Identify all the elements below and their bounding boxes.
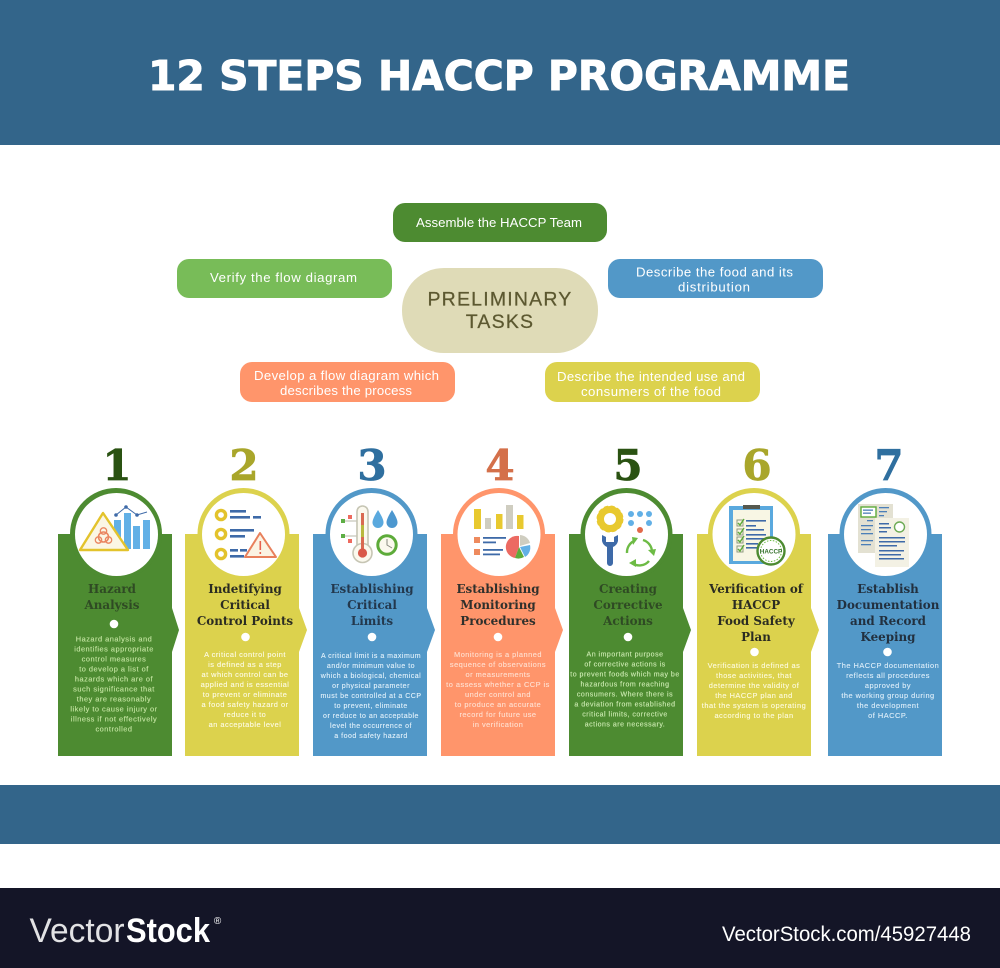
heading 6 (708, 582, 804, 644)
icon: hazard and chart (80, 505, 150, 550)
footer logo: Stock (126, 912, 210, 950)
description 4: Monitoring is a planned (454, 650, 542, 659)
description 1: likely to cause injury or (70, 704, 158, 714)
dot 4 (494, 633, 502, 641)
description 3: must be controlled at a CCP (320, 693, 422, 700)
heading 7: Establish (857, 582, 919, 596)
circle 2 (198, 488, 290, 580)
heading 3: Establishing (330, 582, 414, 596)
description 4: record for future use (459, 710, 537, 719)
step 4 column (441, 441, 563, 756)
step 6 column (697, 441, 819, 756)
description 6: Verification is defined as (708, 661, 800, 670)
task: describe the food: Describe the food and its (636, 264, 793, 280)
heading 4: Establishing (456, 582, 540, 596)
heading 1: Hazard (88, 582, 137, 596)
card 3 (313, 534, 435, 756)
dot 1 (110, 620, 118, 628)
task: verify the flow diagram (177, 259, 392, 298)
description 1: such significance that (73, 684, 155, 694)
heading 7: Documentation (837, 598, 940, 612)
task: describe the intended use: consumers of the food (581, 384, 721, 399)
task: develop a flow diagram (240, 362, 455, 402)
heading 2: Control Points (197, 614, 293, 628)
description 5: hazardous from reaching (581, 682, 669, 688)
description 3: to prevent, eliminate (334, 703, 408, 710)
description 5: An important purpose (587, 652, 663, 658)
heading 6: Food Safety (717, 614, 796, 628)
icon: control points and warning (216, 510, 276, 559)
heading 5 (593, 582, 663, 628)
description 3: and/or minimum value to (327, 663, 415, 670)
footer logo (30, 912, 222, 950)
heading 6: Verification of (708, 582, 804, 596)
centre label: preliminary tasks: PRELIMINARY (427, 288, 573, 310)
description 7 (837, 661, 939, 720)
circle 3 (326, 488, 418, 580)
description 5: consumers. Where there is (577, 692, 673, 698)
heading 7: and Record (850, 614, 927, 628)
heading 3: Critical (347, 598, 397, 612)
number 2: 2 (229, 441, 259, 490)
description 2 (201, 650, 289, 729)
description 5 (570, 652, 680, 728)
footer logo: Vector (30, 912, 124, 950)
description 3: a food safety hazard (334, 733, 408, 740)
description 5: critical limits, corrective (582, 712, 668, 718)
icon: documents (858, 504, 909, 567)
description 4: to produce an accurate (455, 700, 541, 709)
heading 4 (456, 582, 540, 628)
description 6: those activities, that (716, 671, 792, 680)
heading 2: Critical (220, 598, 270, 612)
footer logo: ® (214, 916, 222, 927)
description 2: is defined as a step (208, 660, 282, 669)
dot 2 (241, 633, 250, 641)
task: develop a flow diagram: Develop a flow diagram which (254, 368, 439, 383)
description 1: control measures (82, 654, 146, 664)
heading 1 (84, 582, 140, 612)
description 3: A critical limit is a maximum (321, 653, 421, 660)
header banner (0, 0, 1000, 145)
heading 3 (330, 582, 414, 628)
description 2: at which control can be (201, 670, 289, 679)
dot 5 (624, 633, 632, 641)
number 3: 3 (357, 441, 387, 490)
task: assemble the team (393, 203, 607, 242)
description 4: to assess whether a CCP is (446, 680, 550, 689)
description 5: actions are necessary. (585, 722, 665, 728)
description 1: hazards which are of (75, 674, 154, 684)
description 6: that the system is operating (702, 701, 806, 710)
step 2 column (185, 441, 307, 756)
description 3: or reduce to an acceptable (323, 713, 419, 720)
card 7 (828, 534, 942, 756)
description 7: the working group during (841, 691, 935, 700)
description 1 (70, 634, 158, 734)
heading 6: HACCP (732, 598, 780, 612)
number 4: 4 (485, 441, 515, 490)
heading 3: Limits (351, 614, 393, 628)
description 1: to develop a list of (79, 664, 149, 674)
description 5: a deviation from established (574, 702, 676, 708)
description 4: in verification (473, 720, 523, 729)
heading 5: Creating (599, 582, 658, 596)
step 1 column (58, 441, 179, 756)
card 1 (58, 534, 179, 756)
number 1: 1 (102, 441, 132, 490)
description 3 (320, 653, 422, 740)
description 4: or measurements (465, 670, 531, 679)
heading 4: Monitoring (460, 598, 536, 612)
description 3: which a biological, chemical (320, 673, 421, 680)
description 4: sequence of observations (450, 660, 546, 669)
task: assemble the team: Assemble the HACCP Team (416, 215, 582, 230)
heading 6: Plan (741, 630, 771, 644)
step 7 column (828, 441, 942, 756)
heading 7: Keeping (860, 630, 916, 644)
card 4 (441, 534, 563, 756)
description 7: approved by (865, 681, 911, 690)
dot 7 (883, 648, 892, 656)
task: describe the food (608, 259, 823, 298)
description 7: the development (857, 701, 919, 710)
description 6 (702, 661, 806, 720)
description 6: determine the validity of (709, 681, 800, 690)
footer bar (0, 888, 1000, 968)
step 5 column (569, 441, 691, 756)
description 6: the HACCP plan and (715, 691, 793, 700)
step 3 column (313, 441, 435, 756)
icon: corrective tools (598, 507, 656, 567)
card 2 (185, 534, 307, 756)
description 1: they are reasonably (77, 694, 151, 704)
description 5: of corrective actions is (584, 662, 666, 668)
heading 1: Analysis (84, 598, 140, 612)
card 5 (569, 534, 691, 756)
heading 5: Actions (602, 614, 653, 628)
heading 4: Procedures (460, 614, 536, 628)
description 2: A critical control point (204, 650, 286, 659)
heading 2 (197, 582, 293, 628)
circle 4 (453, 488, 545, 580)
title: 12 STEPS HACCP PROGRAMME (148, 52, 850, 100)
description 4 (446, 650, 550, 729)
dot 3 (368, 633, 376, 641)
circle 5 (580, 488, 672, 580)
lower banner (0, 785, 1000, 844)
icon: thermometer (341, 506, 398, 562)
centre label: preliminary tasks: TASKS (466, 311, 534, 333)
description 5: to prevent foods which may be (570, 672, 680, 678)
icon: clipboard and seal: HACCP (760, 548, 782, 556)
task: describe the intended use: Describe the intended use and (557, 369, 745, 384)
task: develop a flow diagram: describes the process (280, 383, 412, 398)
description 3: or physical parameter (332, 683, 410, 690)
description 1: controlled (95, 724, 133, 734)
description 2: applied and is essential (201, 680, 289, 689)
number 6: 6 (742, 441, 772, 490)
panel: preliminary tasks (177, 203, 823, 402)
card 6 (697, 534, 819, 756)
description 7: reflects all procedures (846, 671, 930, 680)
description 2: to prevent or eliminate (203, 690, 287, 699)
description 1: illness if not effectively (71, 714, 157, 724)
dot 6 (750, 648, 759, 656)
heading 7 (837, 582, 940, 644)
circle 1 (70, 488, 162, 580)
description 2: reduce it to (224, 710, 266, 719)
description 7: The HACCP documentation (837, 661, 939, 670)
task: describe the food: distribution (678, 280, 750, 294)
description 4: under control and (465, 690, 531, 699)
icon: clipboard and seal (729, 505, 784, 564)
icon: monitoring charts (474, 505, 530, 559)
task: verify the flow diagram: Verify the flow diagram (210, 270, 357, 285)
circle 6 (708, 488, 800, 580)
circle 7 (840, 488, 932, 580)
description 6: according to the plan (714, 711, 794, 720)
footer reference: VectorStock.com/45927448 (722, 923, 971, 946)
description 2: a food safety hazard or (201, 700, 289, 709)
description 1: identifies appropriate (74, 644, 154, 654)
task: describe the intended use (545, 362, 760, 402)
centre label: preliminary tasks (402, 268, 598, 353)
number 5: 5 (613, 441, 643, 490)
number 7: 7 (874, 441, 904, 490)
heading 5: Corrective (593, 598, 663, 612)
description 3: level the occurrence of (330, 723, 412, 730)
description 2: an acceptable level (209, 720, 281, 729)
heading 2: Indetifying (208, 582, 282, 596)
description 7: of HACCP. (868, 711, 908, 720)
description 1: Hazard analysis and (76, 634, 152, 644)
